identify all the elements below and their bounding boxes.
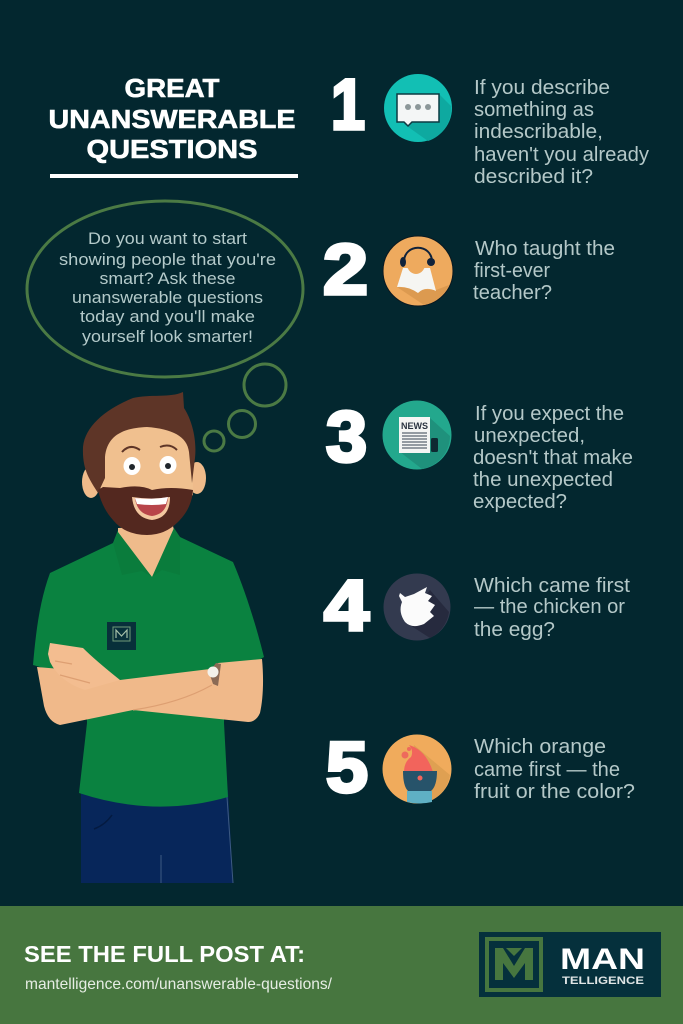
question 1: described it? bbox=[474, 166, 593, 188]
item 4 bbox=[324, 567, 630, 646]
number 1: 1 bbox=[331, 66, 365, 145]
icon: speech bubble bbox=[384, 74, 452, 142]
icon: white bird bbox=[384, 574, 450, 640]
beard bbox=[98, 486, 193, 535]
number 4: 4 bbox=[324, 567, 370, 646]
question 5: came first — the bbox=[474, 759, 620, 781]
bubble text: unanswerable questions bbox=[72, 289, 263, 307]
icon: newspaper: NEWS bbox=[401, 421, 428, 431]
question 4: Which came first bbox=[474, 575, 630, 597]
title: UNANSWERABLE bbox=[48, 104, 296, 134]
shirt bbox=[33, 530, 264, 807]
crossed arms bbox=[37, 643, 263, 725]
question 5 bbox=[474, 736, 635, 803]
eyes bbox=[122, 446, 177, 475]
question 4 bbox=[474, 575, 630, 641]
icon: newspaper bbox=[382, 400, 452, 470]
bubble text: showing people that you're bbox=[59, 251, 276, 269]
question 4: the egg? bbox=[474, 619, 555, 641]
bubble text: today and you'll make bbox=[80, 308, 255, 326]
icon: teacher with book bbox=[383, 236, 453, 306]
question 3 bbox=[473, 403, 633, 513]
title bbox=[48, 73, 298, 178]
number 5: 5 bbox=[326, 729, 368, 808]
footer heading: SEE THE FULL POST AT: bbox=[24, 941, 305, 967]
number 2: 2 bbox=[323, 231, 368, 310]
item 1 bbox=[331, 66, 649, 188]
question 1 bbox=[474, 77, 649, 188]
question 3: doesn't that make bbox=[473, 447, 633, 469]
title: QUESTIONS bbox=[86, 134, 258, 164]
question 5: Which orange bbox=[474, 736, 606, 758]
question 5: fruit or the color? bbox=[474, 781, 635, 803]
logo: MAN bbox=[560, 943, 645, 976]
ears bbox=[82, 462, 206, 498]
item 3 bbox=[326, 398, 633, 513]
question 1: indescribable, bbox=[474, 121, 603, 143]
logo: TELLIGENCE bbox=[562, 975, 644, 987]
thought bubble bbox=[27, 201, 303, 451]
shirt logo bbox=[107, 622, 136, 650]
title: GREAT bbox=[124, 73, 220, 103]
logo bbox=[479, 932, 661, 997]
question 2 bbox=[473, 238, 615, 304]
neck bbox=[118, 526, 176, 577]
question 2: first-ever bbox=[474, 260, 550, 282]
mouth bbox=[132, 497, 170, 520]
item 2 bbox=[323, 231, 615, 310]
icon: torch bbox=[382, 734, 452, 804]
watch bbox=[208, 663, 221, 686]
bubble text: yourself look smarter! bbox=[82, 328, 253, 346]
item 5 bbox=[326, 729, 635, 808]
question 3: the unexpected bbox=[473, 469, 613, 491]
man character bbox=[33, 392, 264, 883]
question 2: teacher? bbox=[473, 282, 552, 304]
question 3: expected? bbox=[473, 491, 567, 513]
bubble text: smart? Ask these bbox=[100, 270, 236, 288]
collar bbox=[113, 528, 180, 577]
question 2: Who taught the bbox=[475, 238, 615, 260]
face bbox=[100, 426, 193, 512]
question 1: something as bbox=[474, 99, 594, 121]
trousers bbox=[81, 790, 233, 883]
bubble text: Do you want to start bbox=[88, 230, 247, 248]
question 1: If you describe bbox=[474, 77, 610, 99]
footer url: mantelligence.com/unanswerable-questions/ bbox=[25, 976, 333, 993]
question 3: unexpected, bbox=[474, 425, 585, 447]
question 4: — the chicken or bbox=[474, 596, 625, 618]
bubble text bbox=[59, 230, 276, 346]
footer band bbox=[0, 906, 683, 1024]
question 3: If you expect the bbox=[475, 403, 624, 425]
hair bbox=[83, 392, 195, 493]
question 1: haven't you already bbox=[474, 144, 649, 166]
number 3: 3 bbox=[326, 398, 367, 477]
